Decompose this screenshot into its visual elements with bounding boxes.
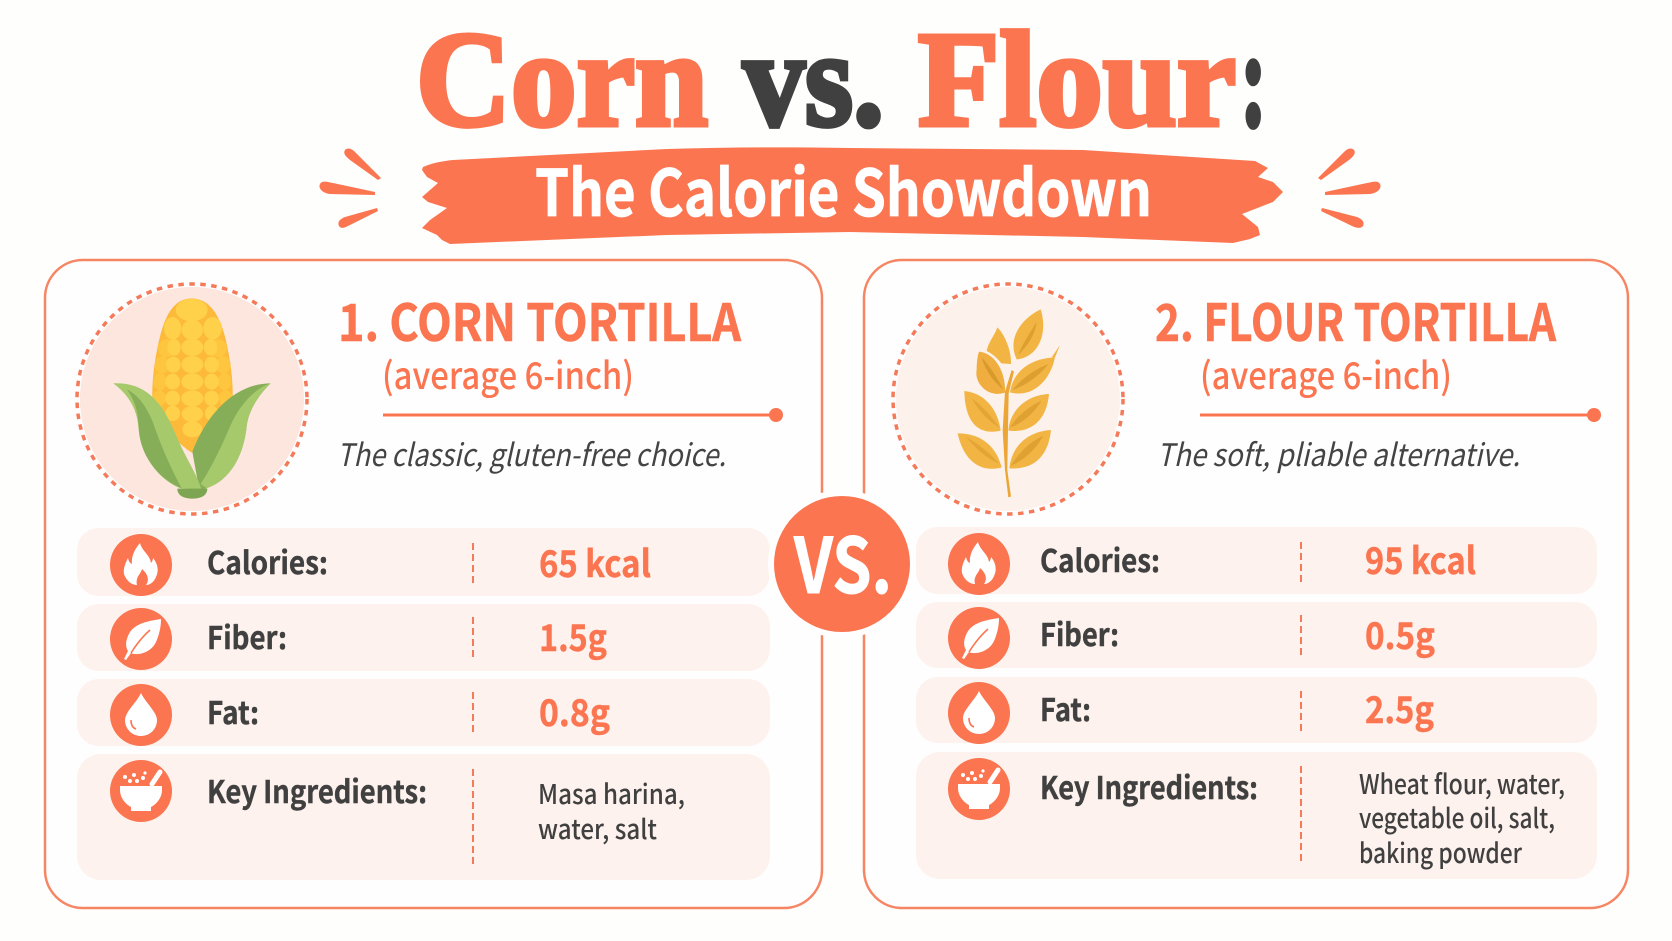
subtitle text: The Calorie Showdown	[535, 143, 1152, 235]
corn row: fat: Fat:	[207, 688, 259, 733]
icon: bowl	[110, 760, 172, 822]
flour row: calories: Calories:	[1040, 536, 1160, 581]
corn row: key ingredients: Key Ingredients:	[207, 767, 427, 812]
corn row: fiber: Fiber:	[207, 613, 287, 658]
title: vs.	[743, 5, 884, 155]
corn illustration	[77, 284, 307, 514]
subtitle banner	[422, 143, 1283, 244]
corn subheading: (average 6-inch)	[382, 346, 634, 400]
flour row: fat	[916, 677, 1597, 744]
flour subheading: (average 6-inch)	[1200, 346, 1452, 400]
flour row: calories	[916, 527, 1597, 595]
flour row: key ingredients: baking powder	[1359, 832, 1523, 871]
corn row: calories: 65 kcal	[539, 534, 651, 588]
corn row: key ingredients	[77, 754, 770, 880]
corn tagline: The classic, gluten-free choice.	[337, 430, 726, 475]
corn row: key ingredients: water, salt	[538, 808, 657, 847]
icon: leaf	[110, 608, 172, 670]
flour row: key ingredients: vegetable oil, salt,	[1359, 797, 1555, 836]
flour divider with dot	[1200, 408, 1601, 422]
panel: corn tortilla	[45, 260, 822, 908]
flour row: fiber: 0.5g	[1365, 606, 1435, 660]
wheat illustration	[893, 284, 1123, 514]
icon: drop	[110, 684, 172, 746]
flour row: key ingredients	[916, 752, 1597, 879]
left husk	[113, 383, 202, 490]
icon: drop	[948, 682, 1010, 744]
flour row: fiber	[916, 602, 1597, 669]
flour row: fiber: Fiber:	[1040, 610, 1119, 655]
flour heading: 2. FLOUR TORTILLA	[1155, 282, 1556, 356]
vs badge	[768, 490, 916, 638]
icon: leaf	[948, 607, 1010, 669]
flour row: key ingredients: Wheat flour, water,	[1359, 763, 1565, 802]
corn row: fat	[77, 679, 770, 746]
flour row: calories: 95 kcal	[1365, 531, 1476, 585]
corn row: calories	[77, 528, 770, 596]
corn heading: 1. CORN TORTILLA	[338, 282, 741, 356]
burst lines right	[1318, 149, 1381, 228]
corn row: fiber	[77, 604, 770, 671]
title: Flour	[918, 5, 1236, 155]
flour row: fat: Fat:	[1040, 685, 1091, 730]
corn row: fat: 0.8g	[539, 683, 610, 737]
title: Corn	[416, 5, 708, 155]
right husk	[192, 383, 271, 490]
corn divider with dot	[383, 408, 783, 422]
vs badge: VS.	[793, 505, 892, 615]
corn row: fiber: 1.5g	[539, 608, 607, 662]
flour row: fat: 2.5g	[1365, 680, 1434, 734]
title: :	[1241, 5, 1266, 155]
corn row: calories: Calories:	[207, 538, 328, 583]
corn row: key ingredients: Masa harina,	[538, 773, 685, 812]
title	[416, 5, 1266, 155]
flour row: key ingredients: Key Ingredients:	[1040, 763, 1258, 808]
icon: flame	[110, 534, 172, 596]
flour tagline: The soft, pliable alternative.	[1157, 430, 1520, 475]
panel: flour tortilla	[864, 260, 1628, 908]
icon: flame	[948, 533, 1010, 595]
icon: bowl	[948, 758, 1010, 820]
burst lines left	[319, 149, 381, 228]
